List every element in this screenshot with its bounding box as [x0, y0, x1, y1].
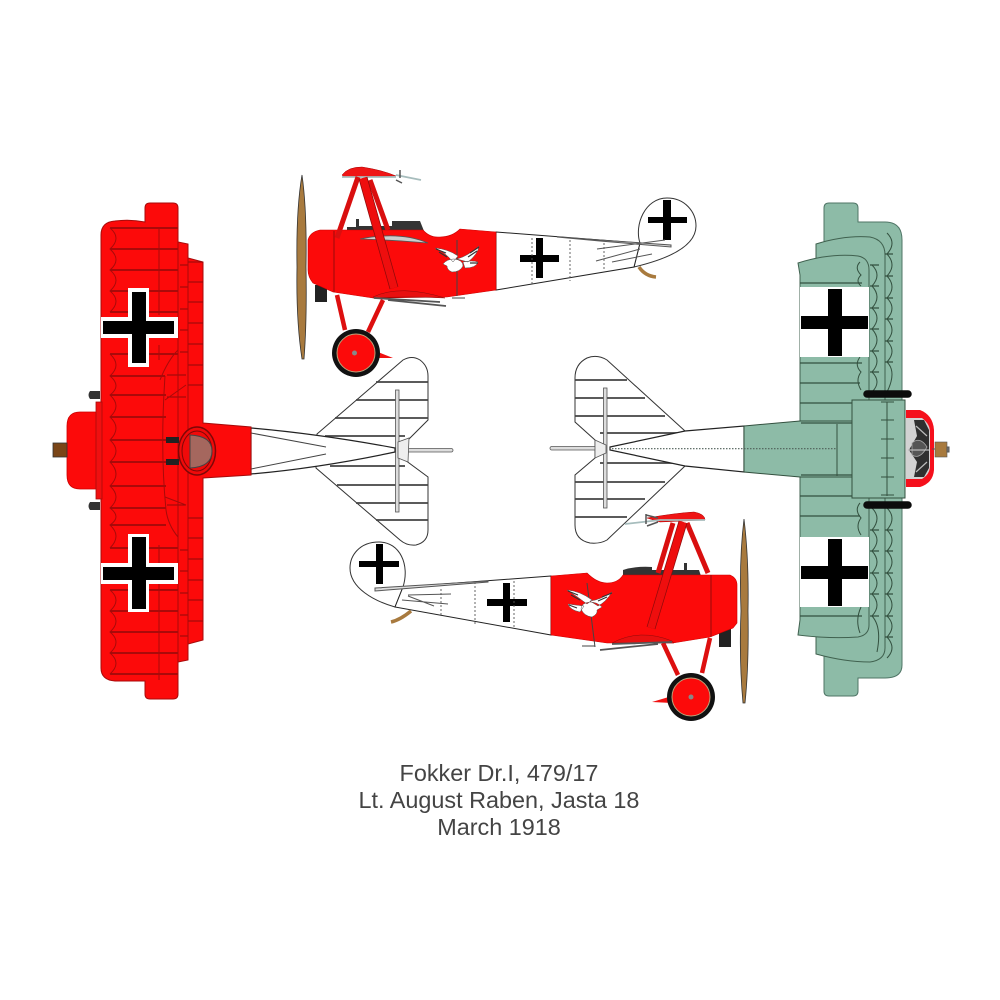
- wing trailing edge: [342, 175, 421, 180]
- white rear fuselage: [496, 232, 640, 290]
- fuselage panel details: [881, 402, 894, 496]
- propeller: [297, 175, 306, 359]
- upper wing tips: [824, 203, 902, 696]
- red fuselage: [308, 229, 496, 298]
- undercarriage tips: [88, 391, 100, 510]
- tail fin cross: [359, 544, 399, 584]
- wing trailing edge: [625, 520, 705, 524]
- panel lines: [441, 581, 514, 628]
- wing outlines: [159, 222, 188, 680]
- cowling line: [333, 231, 335, 292]
- tail fin: [634, 198, 696, 267]
- balkenkreuz top: [101, 288, 178, 367]
- tail fin: [350, 542, 405, 607]
- propeller hub: [53, 443, 67, 457]
- white cross panel bottom: [800, 537, 869, 607]
- caption: [359, 760, 639, 840]
- cowling line: [710, 575, 712, 637]
- landing gear struts: [663, 638, 710, 675]
- upper wing: [647, 512, 705, 522]
- rear fuselage right: [610, 426, 744, 472]
- guns: [623, 563, 701, 576]
- white rear fuselage: [395, 576, 551, 635]
- landing gear struts: [337, 295, 383, 332]
- wing root panel: [360, 236, 428, 243]
- lower wing: [798, 255, 869, 638]
- stork emblem: [567, 583, 612, 647]
- interplane strut outline: [651, 522, 683, 628]
- top view: green underside aircraft: [550, 203, 949, 696]
- tail plane: [557, 237, 671, 247]
- wheel: [332, 329, 393, 377]
- side view: lower aircraft: [350, 512, 748, 721]
- fuselage cross: [520, 238, 559, 278]
- green tail fuselage: [744, 421, 852, 477]
- rib bars: [870, 254, 893, 637]
- wings and red forward fuselage: [101, 203, 251, 699]
- cabane struts: [337, 177, 388, 238]
- wheel: [652, 673, 715, 721]
- wing ribs: [800, 283, 862, 616]
- aileron horn: [646, 514, 658, 526]
- scallops and ribs: [857, 233, 892, 658]
- tail surfaces left: [316, 358, 453, 545]
- tyres: [867, 394, 908, 505]
- propeller: [740, 519, 748, 703]
- interplane strut: [363, 178, 394, 288]
- aileron horn: [396, 170, 402, 183]
- engine underside: [315, 285, 327, 302]
- wing scallops: [110, 228, 116, 674]
- machine guns: [166, 437, 179, 465]
- engine: [906, 418, 930, 479]
- tail wires: [596, 240, 665, 262]
- caption: March 1918: [437, 814, 561, 840]
- stork emblem: [435, 240, 479, 298]
- fuselage detail: [836, 424, 838, 476]
- lower wing edge: [600, 642, 672, 650]
- guns: [347, 219, 424, 231]
- tail skid: [391, 611, 411, 622]
- propeller hub: [935, 442, 947, 457]
- middle wing: [816, 237, 885, 662]
- tail wires: [402, 594, 451, 606]
- panel lines: [532, 238, 604, 284]
- wing ribs: [110, 228, 178, 674]
- rear fuselage left: [251, 428, 395, 474]
- caption: Lt. August Raben, Jasta 18: [359, 787, 639, 813]
- top view: red aircraft: [53, 203, 453, 699]
- caption: Fokker Dr.I, 479/17: [400, 760, 598, 786]
- interplane strut outline: [363, 178, 394, 288]
- tail fin cross: [648, 200, 687, 240]
- white cross panel top: [800, 287, 869, 357]
- hub spinner: [932, 447, 949, 452]
- middle and lower wing ribs: [167, 262, 203, 636]
- engine underside: [719, 628, 731, 647]
- forward fuselage: [852, 400, 905, 498]
- fuselage cross: [487, 583, 527, 622]
- cabane struts: [658, 523, 708, 573]
- cockpit: [178, 427, 216, 475]
- red fuselage: [551, 573, 737, 643]
- cross top: [801, 289, 868, 356]
- lower wing: [373, 291, 445, 298]
- engine cowling: [67, 412, 97, 489]
- upper wing: [342, 167, 396, 177]
- tail surfaces right: [550, 356, 685, 543]
- fuselage longerons left: [251, 433, 326, 469]
- red cowling: [906, 410, 934, 487]
- interplane strut: [651, 522, 683, 628]
- side view: upper aircraft: [297, 167, 696, 377]
- tail plane: [375, 581, 488, 591]
- dotted centre line: [612, 448, 836, 450]
- tail skid: [639, 267, 656, 277]
- balkenkreuz bottom: [101, 534, 178, 612]
- lower wing edge: [374, 298, 446, 306]
- lower wing: [612, 635, 674, 643]
- cross bottom: [801, 539, 868, 606]
- cowling back: [96, 402, 102, 499]
